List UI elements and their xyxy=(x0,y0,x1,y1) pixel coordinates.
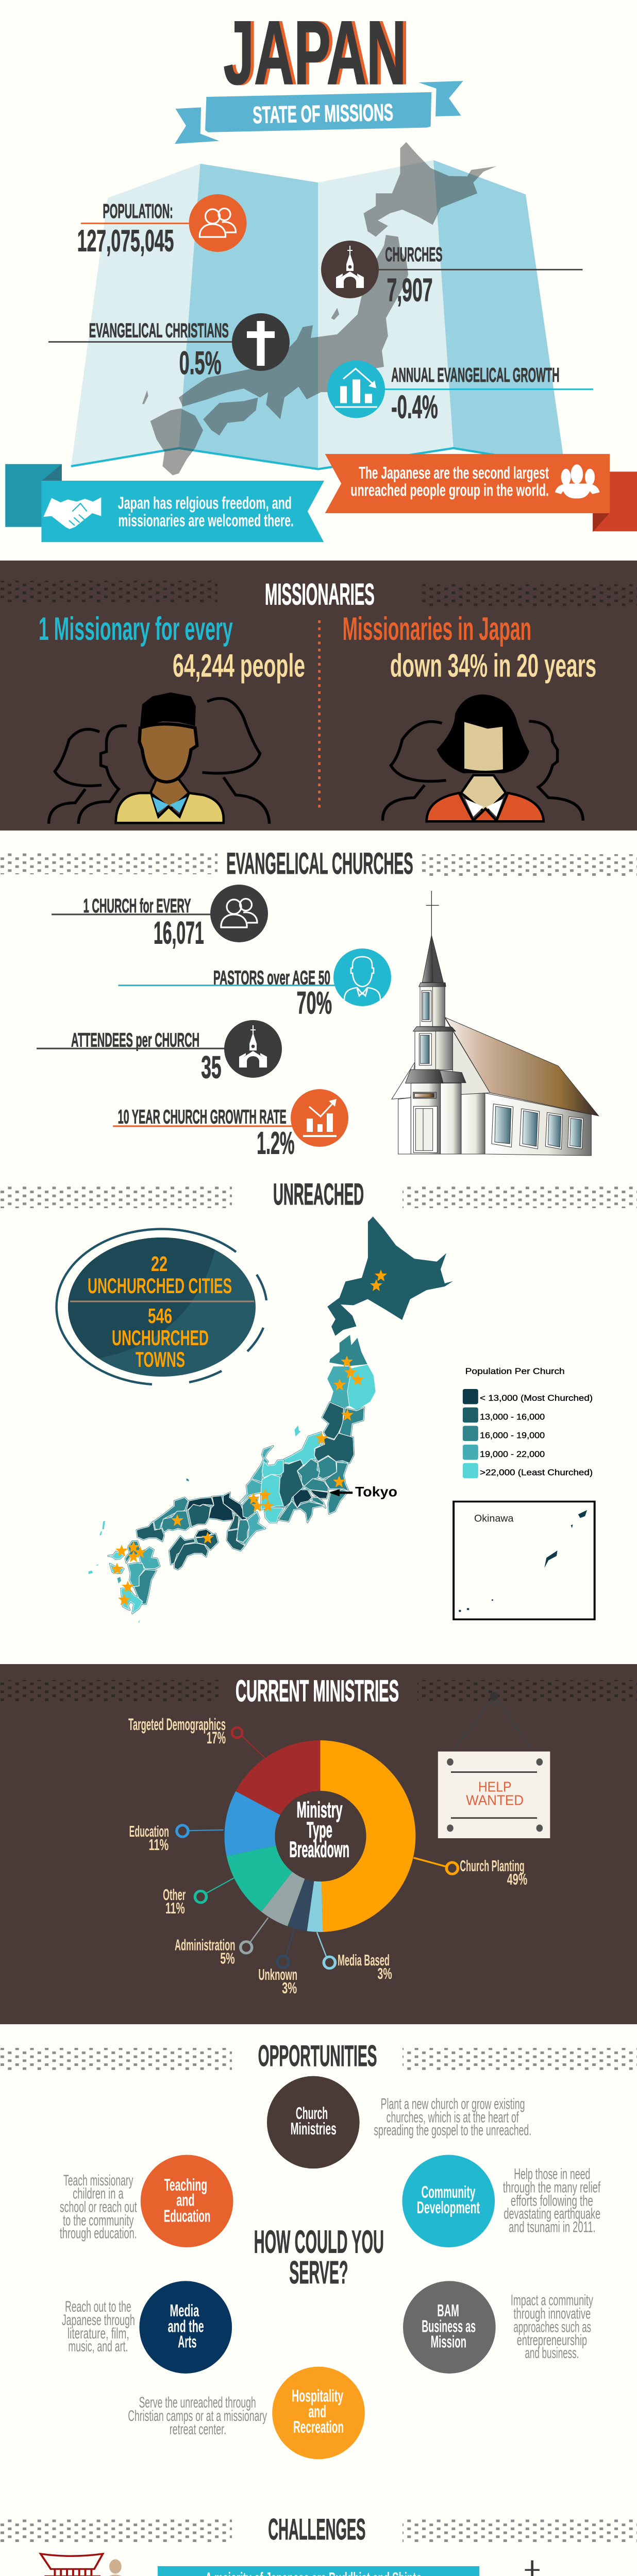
chart label: administration: 5% xyxy=(220,1949,235,1967)
stat: evangelical christians: 0.5% xyxy=(179,345,222,381)
panel: missionaries: MISSIONARIES xyxy=(265,578,375,611)
text: church ministries description: churches, which is at the heart of xyxy=(387,2109,519,2126)
panel: header and overview xyxy=(5,2,637,542)
text: hospitality description: Serve the unreached through xyxy=(139,2394,256,2411)
stat: 1 church for every 16,071 xyxy=(52,895,211,951)
Japan silhouette xyxy=(142,142,496,475)
text: BAM description xyxy=(511,2292,593,2361)
donut chart: ministry type breakdown xyxy=(225,1740,415,1932)
panel: current ministries: Media Based xyxy=(338,1951,390,1969)
icon: chart declining xyxy=(327,361,385,418)
circle: teaching and education: Education xyxy=(164,2206,210,2226)
callout: unchurched cities and towns xyxy=(52,1226,266,1384)
heading: current ministries: CURRENT MINISTRIES xyxy=(236,1674,399,1708)
stat: 10 year church growth rate: 10 YEAR CHURCH GROWTH RATE xyxy=(118,1106,287,1128)
map label: Tokyo with arrow: Tokyo xyxy=(355,1484,397,1500)
text: teaching description: children in a xyxy=(73,2185,124,2202)
title xyxy=(224,2,410,103)
help wanted sign: WANTED xyxy=(466,1792,524,1808)
text: teaching description: through education. xyxy=(60,2225,137,2242)
circle: community development: Community xyxy=(421,2182,475,2202)
stat: attendees per church: 35 xyxy=(201,1050,222,1085)
panel: current ministries: Church Planting xyxy=(460,1857,525,1874)
icon: pastor xyxy=(333,948,391,1006)
text: media description: Japanese through xyxy=(62,2312,135,2329)
chart label: other: 11% xyxy=(165,1899,185,1917)
inset map: Okinawa xyxy=(454,1502,595,1619)
banner: religious freedom: Japan has relgious freedom, and xyxy=(118,494,292,513)
panel: missionaries xyxy=(0,561,637,831)
dotted header bands xyxy=(0,1680,637,1702)
stat: pastors over age 50: 70% xyxy=(296,986,332,1021)
panel: opportunities: OPPORTUNITIES xyxy=(258,2039,377,2072)
chart center label: Ministry xyxy=(296,1797,343,1822)
callout: unchurched cities and towns: TOWNS xyxy=(136,1347,185,1371)
legend: population per church: < 13,000 (Most Churched) xyxy=(480,1393,593,1403)
icon: torii and Buddha xyxy=(41,2554,150,2576)
legend: population per church: 13,000 - 16,000 xyxy=(480,1412,545,1421)
panel: evangelical churches xyxy=(0,847,637,1161)
icon: church circle xyxy=(224,1020,282,1078)
legend: population per church: >22,000 (Least Churched) xyxy=(480,1468,593,1477)
illustration: missionary woman and outlined crowd xyxy=(383,694,583,821)
circle: hospitality and recreation: Recreation xyxy=(293,2417,344,2437)
illustration: missionary man and outlined crowd xyxy=(49,692,270,824)
chart label: church planting xyxy=(413,1857,527,1888)
text: media description xyxy=(62,2298,135,2355)
text: media description: literature, film, xyxy=(68,2325,129,2342)
callout: unchurched cities and towns: UNCHURCHED xyxy=(112,1326,209,1350)
chart label: targeted demographics: Targeted Demographics xyxy=(128,1715,226,1734)
callout: Buddhist and Shinto majority xyxy=(158,2566,479,2576)
inset map: Okinawa: Okinawa xyxy=(474,1513,514,1524)
text: hospitality description: Christian camps or at a missionary xyxy=(128,2408,267,2424)
callout: unchurched cities and towns: UNCHURCHED CITIES xyxy=(88,1274,232,1298)
text: community description xyxy=(503,2165,600,2235)
chart label: unknown xyxy=(258,1928,297,1997)
legend: population per church: 19,000 - 22,000 xyxy=(480,1449,545,1459)
callout: unchurched cities and towns: 22 xyxy=(151,1252,167,1276)
chart label: education: 11% xyxy=(149,1836,169,1854)
title: JAPAN xyxy=(224,2,406,103)
dotted header bands xyxy=(0,2048,637,2071)
legend: population per church: 16,000 - 19,000 xyxy=(480,1430,545,1440)
map: western Japan xyxy=(89,1446,283,1623)
chart center label: Type xyxy=(307,1817,332,1842)
stat: population: 127,075,045 xyxy=(77,224,174,258)
chart label: unknown: 3% xyxy=(282,1979,297,1997)
help wanted sign xyxy=(438,1692,550,1838)
stat: population: POPULATION: xyxy=(103,200,173,222)
panel: opportunities: HOW COULD YOU xyxy=(254,2224,384,2260)
icon: dark church xyxy=(488,2561,576,2576)
stat: attendees per church: ATTENDEES per CHURCH xyxy=(71,1029,199,1051)
circle: church ministries: Church xyxy=(296,2104,328,2123)
circle: BAM business as mission xyxy=(403,2281,496,2374)
circle: church ministries: Ministries xyxy=(291,2119,337,2139)
folded map xyxy=(71,160,565,469)
text: teaching description: Teach missionary xyxy=(63,2172,133,2189)
text: church ministries description xyxy=(374,2095,531,2139)
text: media description: music, and art. xyxy=(68,2338,128,2355)
panel: current ministries: Unknown xyxy=(258,1965,297,1984)
text: teaching description xyxy=(60,2172,137,2242)
heading: how could you serve xyxy=(254,2224,384,2290)
text: media description: Reach out to the xyxy=(65,2298,131,2315)
banner: second largest unreached xyxy=(325,454,637,532)
chart label: media based xyxy=(317,1932,392,1982)
stat: attendees per church xyxy=(37,1029,226,1085)
circle: hospitality and recreation: Hospitality xyxy=(292,2386,343,2405)
panel: header and overview: EVANGELICAL CHRISTIANS xyxy=(89,319,229,342)
text: BAM description: and business. xyxy=(525,2344,579,2361)
circle: BAM business as mission: Mission xyxy=(431,2332,466,2351)
stat: one missionary for every 64,244 people xyxy=(39,611,305,684)
chart label: education: Education xyxy=(129,1822,169,1840)
chart center label xyxy=(289,1797,349,1862)
icon: church xyxy=(321,241,379,298)
stat: pastors over age 50: PASTORS over AGE 50 xyxy=(213,967,330,989)
chart label: administration: Administration xyxy=(175,1936,235,1954)
stat: pastors over age 50 xyxy=(118,967,335,1021)
stat: 10 year church growth rate xyxy=(113,1106,295,1161)
panel: current ministries xyxy=(0,1664,637,2024)
map stars: unchurched cities xyxy=(111,1269,387,1605)
panel: unreached: UNREACHED xyxy=(273,1178,364,1211)
title: JAPAN xyxy=(227,2,410,103)
stat: churches xyxy=(378,243,582,308)
icon: growth chart xyxy=(291,1089,348,1147)
panel: challenges: CHALLENGES xyxy=(268,2513,365,2546)
circle: teaching and education: Teaching xyxy=(164,2175,207,2194)
chart label: education xyxy=(129,1822,224,1854)
dotted header bands xyxy=(0,2519,637,2542)
illustration: large church xyxy=(392,891,599,1156)
panel: opportunities xyxy=(0,2039,637,2459)
stat: 10 year church growth rate: 1.2% xyxy=(257,1126,295,1161)
legend: population per church xyxy=(463,1366,593,1478)
icon: people circle xyxy=(210,885,268,942)
stat: one missionary for every 64,244 people: 1 Missionary for every xyxy=(39,611,233,647)
stat: churches: CHURCHES xyxy=(385,243,442,266)
map label: Tokyo with arrow xyxy=(329,1484,397,1500)
chart label: other: Other xyxy=(163,1886,186,1904)
map: northern Japan xyxy=(327,1216,454,1411)
stat: 1 church for every 16,071: 1 CHURCH for EVERY xyxy=(83,895,191,917)
text: teaching description: to the community xyxy=(63,2212,134,2229)
dotted header bands xyxy=(0,1185,637,1208)
icon: people xyxy=(189,194,246,252)
stat: population xyxy=(77,200,191,258)
chart label: targeted demographics: 17% xyxy=(207,1728,226,1747)
banner: religious freedom xyxy=(5,464,324,542)
icon: cross xyxy=(232,313,290,371)
panel: unreached xyxy=(0,1178,637,1623)
text: hospitality description xyxy=(128,2394,267,2437)
circle: media and the arts xyxy=(139,2281,232,2374)
chart label: other xyxy=(163,1878,234,1917)
circle: community development: Development xyxy=(417,2198,480,2217)
circle: teaching and education xyxy=(141,2155,233,2247)
chart label: media based: 3% xyxy=(377,1964,392,1982)
map: central Japan xyxy=(264,1402,364,1522)
dotted header bands xyxy=(0,581,637,606)
panel: challenges xyxy=(0,2513,637,2576)
stat: missionaries down 34% xyxy=(343,611,596,684)
panel: evangelical churches: EVANGELICAL CHURCHES xyxy=(226,847,413,880)
circle: hospitality and recreation xyxy=(272,2367,365,2459)
chart label: targeted demographics xyxy=(128,1715,265,1758)
circle: BAM business as mission: BAM xyxy=(437,2301,459,2320)
circle: church ministries xyxy=(267,2076,360,2168)
dotted header bands xyxy=(0,852,637,876)
text: hospitality description: retreat center. xyxy=(170,2420,226,2437)
ribbon subtitle xyxy=(175,81,463,144)
circle: community development xyxy=(402,2155,495,2247)
stat: 1 church for every 16,071: 16,071 xyxy=(154,916,204,951)
stat: churches: 7,907 xyxy=(387,272,433,308)
circle: hospitality and recreation: and xyxy=(308,2402,326,2421)
circle: teaching and education: and xyxy=(176,2190,195,2210)
stat: annual evangelical growth: -0.4% xyxy=(391,389,438,426)
circle: BAM business as mission: Business as xyxy=(422,2316,476,2336)
circle: media and the arts: Media xyxy=(170,2301,199,2320)
stat: one missionary for every 64,244 people: 64,244 people xyxy=(173,648,305,684)
ribbon subtitle: STATE OF MISSIONS xyxy=(253,99,394,128)
callout: unchurched cities and towns: 546 xyxy=(148,1304,172,1328)
text: teaching description: school or reach out xyxy=(60,2198,137,2215)
help wanted sign: HELP xyxy=(478,1779,511,1795)
chart label: administration xyxy=(175,1918,268,1967)
circle: media and the arts: and the xyxy=(168,2316,204,2336)
heading: how could you serve: SERVE? xyxy=(289,2255,348,2290)
legend: population per church: Population Per Church xyxy=(465,1366,565,1376)
stat: evangelical christians xyxy=(48,319,233,381)
banner: religious freedom: missionaries are welcomed there. xyxy=(118,511,294,530)
chart label: church planting: 49% xyxy=(507,1870,527,1888)
panel: current ministries: Breakdown xyxy=(289,1837,349,1862)
circle: media and the arts: Arts xyxy=(178,2332,197,2351)
stat: annual evangelical growth xyxy=(384,364,593,426)
